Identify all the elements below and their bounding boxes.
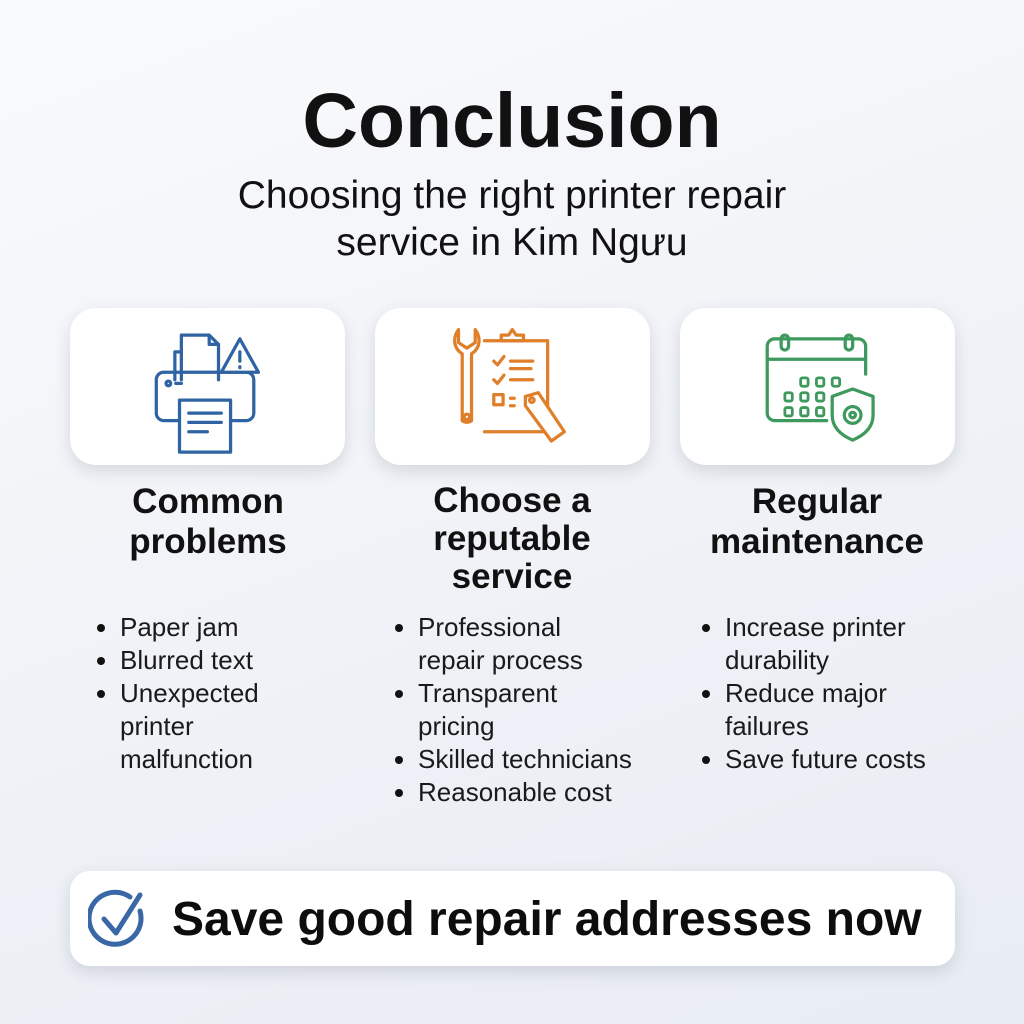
icon: printer with warning — [154, 334, 260, 454]
title: Conclusion — [302, 78, 722, 164]
heading: common problems: Common — [132, 482, 284, 521]
icon: calendar with shield gear — [766, 334, 875, 442]
list: reputable service: Reasonable cost — [418, 777, 612, 807]
subtitle — [238, 174, 786, 264]
icon: wrench checklist tag — [453, 328, 566, 443]
list: common problems: Blurred text — [120, 645, 253, 675]
list: common problems: Unexpected — [120, 678, 259, 708]
list: maintenance: Save future costs — [725, 744, 926, 774]
subtitle: Choosing the right printer repair — [238, 174, 786, 217]
panel: maintenance icon card — [680, 308, 955, 465]
heading: common problems: problems — [129, 522, 287, 561]
list: common problems: Paper jam — [120, 612, 238, 642]
icon: check circle — [88, 890, 144, 947]
list: maintenance: Reduce major — [725, 678, 887, 708]
list: maintenance: failures — [725, 711, 809, 741]
heading: regular maintenance: Regular — [752, 482, 882, 521]
subtitle: service in Kim Ngưu — [336, 221, 688, 264]
heading: reputable service: service — [452, 557, 572, 596]
heading: regular maintenance — [710, 482, 924, 561]
list: reputable service: Skilled technicians — [418, 744, 632, 774]
list: reputable service: Professional — [418, 612, 561, 642]
panel: reputable service icon card — [375, 308, 650, 465]
heading: reputable service — [433, 481, 591, 596]
heading: common problems — [129, 482, 287, 561]
list: maintenance: durability — [725, 645, 829, 675]
list: reputable service: repair process — [418, 645, 583, 675]
list: reputable service: Transparent — [418, 678, 557, 708]
callout text: Save good repair addresses now — [172, 893, 922, 946]
heading: reputable service: reputable — [433, 519, 591, 558]
list: common problems: printer — [120, 711, 194, 741]
list: common problems: malfunction — [120, 744, 253, 774]
heading: regular maintenance: maintenance — [710, 522, 924, 561]
list: reputable service — [395, 612, 632, 807]
list: maintenance: Increase printer — [725, 612, 906, 642]
list: common problems — [97, 612, 259, 774]
panel: common problems icon card — [70, 308, 345, 465]
heading: reputable service: Choose a — [433, 481, 591, 520]
list: reputable service: pricing — [418, 711, 495, 741]
callout banner — [70, 871, 955, 966]
list: maintenance — [702, 612, 926, 774]
